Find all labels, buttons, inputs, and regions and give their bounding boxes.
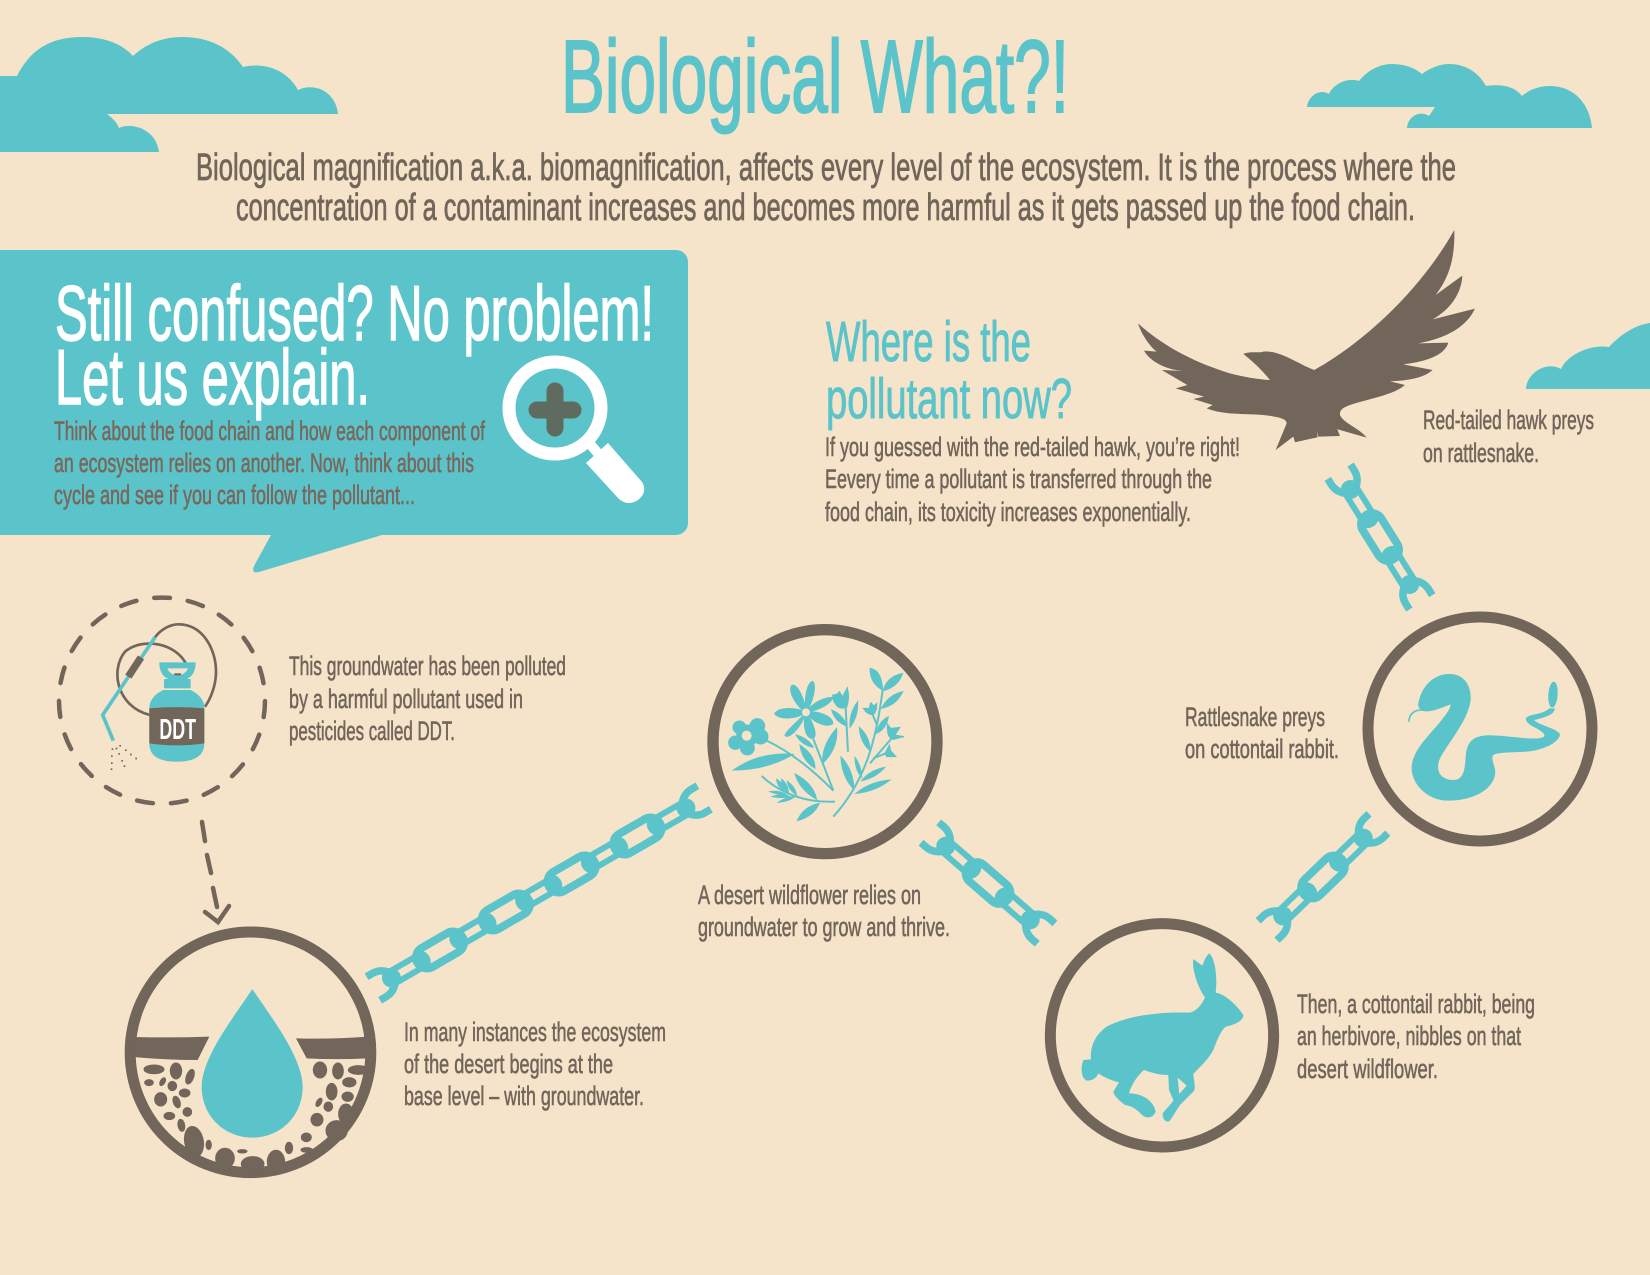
icon: wildflower circle — [713, 630, 937, 854]
hawk caption: on rattlesnake. — [1423, 438, 1539, 468]
wildflower caption: A desert wildflower relies on — [698, 880, 921, 910]
rabbit caption: desert wildflower. — [1297, 1054, 1438, 1084]
wildflower caption — [698, 880, 950, 942]
rattlesnake caption — [1185, 702, 1339, 764]
pollutant explanation text: If you guessed with the red-tailed hawk, you’re right! — [825, 432, 1240, 462]
panel body text: cycle and see if you can follow the pollutant... — [54, 480, 415, 510]
rabbit caption — [1297, 989, 1535, 1084]
panel body text: Think about the food chain and how each component of — [54, 416, 485, 446]
intro text — [196, 147, 1456, 229]
panel heading — [55, 269, 654, 421]
groundwater caption: base level – with groundwater. — [404, 1081, 644, 1111]
icon: DDT sprayer in dashed circle: DDT — [159, 714, 196, 746]
hawk caption — [1423, 405, 1594, 468]
chain: groundwater to wildflower — [367, 786, 711, 1000]
panel body text — [54, 416, 485, 510]
icon: rattlesnake circle — [1368, 617, 1592, 841]
panel heading: Still confused? No problem! — [55, 269, 654, 357]
DDT caption: pesticides called DDT. — [289, 716, 455, 746]
rabbit caption: an herbivore, nibbles on that — [1297, 1021, 1521, 1051]
arrow: dashed from DDT to groundwater — [202, 822, 229, 922]
panel heading: Let us explain. — [55, 333, 370, 421]
chain: rabbit to rattlesnake — [1258, 814, 1388, 940]
icon: hawk — [1138, 230, 1475, 450]
icon: DDT sprayer in dashed circle — [59, 598, 265, 804]
wildflower caption: groundwater to grow and thrive. — [698, 912, 950, 942]
chain: rattlesnake to hawk — [1328, 465, 1432, 609]
rattlesnake caption: on cottontail rabbit. — [1185, 734, 1339, 764]
cloud: top left — [0, 37, 338, 152]
pollutant explanation text: food chain, its toxicity increases exponentially. — [825, 497, 1191, 527]
heading: where is the pollutant: pollutant now? — [826, 367, 1072, 431]
pollutant explanation text — [825, 432, 1240, 527]
cloud: top right — [1307, 64, 1592, 128]
groundwater caption: In many instances the ecosystem — [404, 1017, 666, 1047]
chain: wildflower to rabbit — [921, 822, 1055, 944]
groundwater caption: of the desert begins at the — [404, 1049, 613, 1079]
DDT caption — [289, 651, 566, 746]
title: Biological What?! — [561, 19, 1069, 134]
rattlesnake caption: Rattlesnake preys — [1185, 702, 1325, 732]
panel body text: an ecosystem relies on another. Now, think about this — [54, 448, 474, 478]
icon: groundwater circle — [130, 932, 371, 1173]
DDT caption: This groundwater has been polluted — [289, 651, 566, 681]
cloud: right — [1526, 323, 1650, 389]
groundwater caption — [404, 1017, 666, 1111]
DDT caption: by a harmful pollutant used in — [289, 684, 523, 714]
icon: magnifying glass — [509, 362, 644, 503]
panel: speech bubble — [0, 250, 688, 572]
rabbit caption: Then, a cottontail rabbit, being — [1297, 989, 1535, 1019]
pollutant explanation text: Eevery time a pollutant is transferred through the — [825, 464, 1212, 494]
heading: where is the pollutant: Where is the — [826, 310, 1031, 374]
heading: where is the pollutant — [826, 310, 1072, 431]
icon: rabbit circle — [1050, 924, 1274, 1147]
